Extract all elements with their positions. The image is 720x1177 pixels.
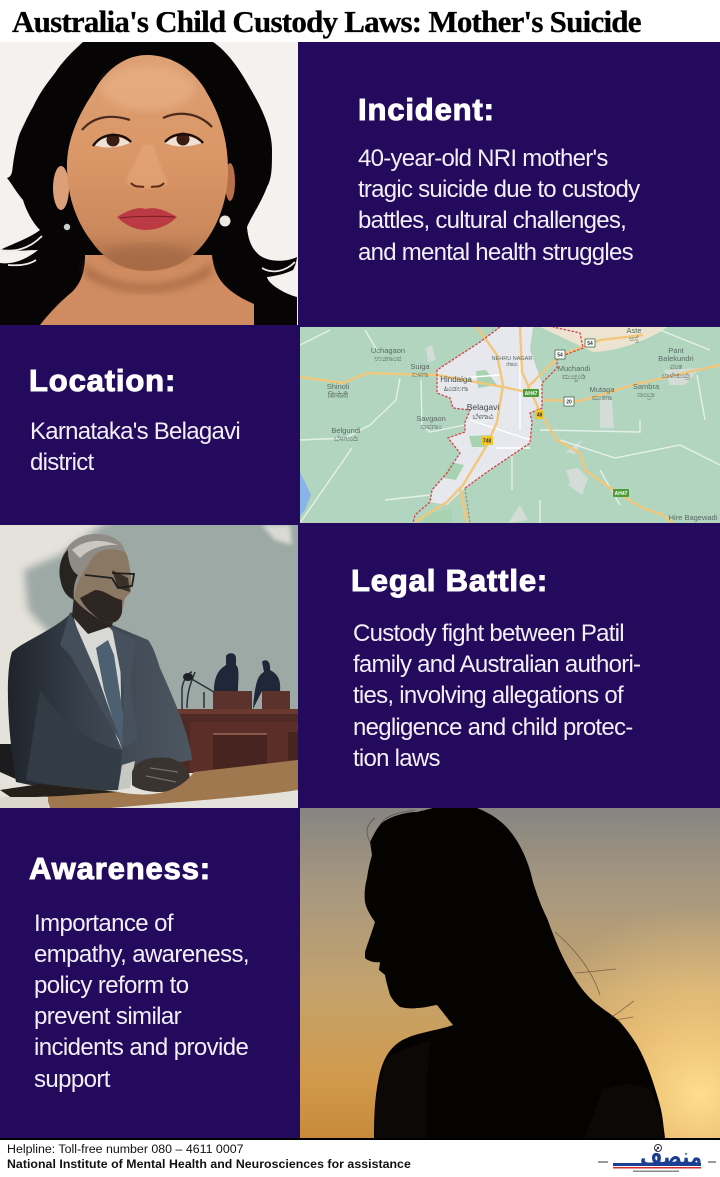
neck and head [72, 595, 118, 634]
lips [117, 208, 177, 230]
map labels: Pant [668, 346, 685, 355]
cuff and hands [118, 761, 135, 790]
shoulder tone [374, 1040, 430, 1138]
map labels: ಸಾಂಬ್ರಾ [637, 390, 655, 399]
map labels: Mutaga [589, 385, 615, 394]
desk [10, 760, 298, 808]
text: incident details [358, 145, 640, 266]
text: legal battle details: Custody fight between Patil [353, 620, 624, 647]
map labels: ಬೆಳಗಾವಿ [472, 412, 494, 421]
highway shields: 20 [566, 400, 572, 406]
text: awareness details: empathy, awareness, [34, 941, 249, 968]
panel: awareness [0, 808, 300, 1138]
panel: location [0, 325, 300, 525]
text: awareness details: prevent similar [34, 1003, 181, 1030]
text: location details: district [30, 449, 93, 476]
map labels: NEHRU NAGAR [492, 356, 532, 362]
wisps of hair [367, 810, 634, 1020]
panel: legal battle [298, 525, 720, 808]
nose [126, 145, 168, 188]
highway shields: 748 [483, 438, 491, 444]
map labels: ಸಾವಗಾಂ [420, 422, 442, 431]
map labels: ಅಸ್ತೆ [629, 334, 639, 343]
chair [0, 744, 18, 780]
text: incident details: and mental health struggles [358, 239, 633, 266]
footer: helpline: National Institute of Mental Health and Neurosciences for assistance [7, 1157, 411, 1171]
footer: helpline: Helpline: Toll-free number 080 – 4611 0007 [7, 1142, 244, 1156]
map labels: Shinoli [327, 382, 350, 391]
text: awareness details [34, 910, 249, 1093]
map labels: ಹಿಂಡಲಗಾ [444, 384, 469, 393]
map labels: ಸುಳಗಾ [411, 370, 429, 379]
text: location details [30, 418, 240, 476]
map labels: ಬೆಳಗುಂದಿ [334, 434, 358, 443]
highway shields: AH47 [525, 391, 538, 397]
beige town [540, 327, 667, 352]
text: legal battle details [353, 620, 640, 772]
logo [598, 1142, 716, 1172]
text: legal battle details: ties, involving allegations of [353, 682, 623, 709]
highway shields: 54 [587, 341, 593, 347]
map labels: Belgundi [331, 426, 361, 435]
map labels: Hindalga [440, 375, 472, 384]
hair [60, 534, 125, 600]
map labels: ಮುತಗಾ [592, 393, 612, 402]
heading: awareness: Awareness: [29, 851, 211, 886]
map labels: Suiga [410, 362, 430, 371]
eyes [94, 136, 130, 147]
photo: portrait of the mother [0, 42, 298, 325]
map labels: Muchandi [558, 364, 591, 373]
map labels: Savgaon [416, 414, 446, 423]
highway shields [481, 339, 629, 497]
map labels: Balekundri [658, 354, 694, 363]
text: awareness details: Importance of [34, 910, 173, 936]
map labels: ಉಚಗಾಂವ [375, 354, 402, 363]
torso [8, 612, 192, 791]
map labels: ಬಾಳೇಕುಂದ್ರಿ [662, 371, 691, 380]
text: location details: Karnataka's Belagavi [30, 418, 240, 445]
face [67, 55, 228, 271]
text: legal battle details: tion laws [353, 745, 440, 772]
map labels: ಮುಚ್ಚಂಡಿ [562, 372, 586, 381]
title: Australia's Child Custody Laws: Mother's Suicide [12, 4, 641, 39]
map: Belagavi district [300, 327, 720, 523]
minor roads [300, 330, 720, 523]
highway shields: AH47 [615, 491, 628, 497]
background figures [214, 653, 238, 691]
highway shields: 54 [557, 352, 563, 358]
eyebrows [82, 117, 130, 130]
panel: incident [298, 42, 720, 327]
map labels: Sambra [633, 382, 660, 391]
map labels: ನೆಹರು [506, 362, 518, 368]
wall paint [24, 510, 310, 730]
divider line [0, 1138, 720, 1140]
map labels: Uchagaon [371, 346, 405, 355]
text: incident details: tragic suicide due to custody [358, 176, 639, 203]
illustration: man in courtroom [0, 525, 298, 808]
shirt [72, 612, 122, 750]
city boundary [413, 327, 500, 523]
text: incident details: battles, cultural challenges, [358, 207, 626, 234]
judge bench [172, 709, 298, 773]
city area [430, 327, 542, 505]
heading: legal battle: Legal Battle: [351, 563, 548, 598]
text: awareness details: support [34, 1066, 110, 1093]
map labels: शिनोली [328, 391, 349, 400]
text: awareness details: incidents and provide [34, 1034, 248, 1061]
earrings [220, 216, 230, 226]
glasses [85, 573, 134, 588]
highway shields: 48 [537, 412, 542, 418]
map labels [327, 326, 718, 522]
neck and chest [40, 255, 254, 325]
ears [53, 166, 69, 210]
hair flicks [0, 236, 295, 271]
arm fold [26, 690, 122, 790]
text: incident details: 40-year-old NRI mother's [358, 145, 608, 172]
map labels: ಪಂತ [670, 362, 682, 371]
text: legal battle details: family and Australian authori- [353, 651, 640, 678]
tie [96, 640, 124, 750]
lapels [60, 612, 122, 745]
heading: location: Location: [29, 363, 176, 398]
text: legal battle details: negligence and child protec- [353, 714, 632, 741]
microphone [182, 672, 214, 709]
highways [300, 327, 720, 523]
footer: helpline [7, 1142, 411, 1171]
text: awareness details: policy reform to [34, 972, 188, 999]
logo: منصف [640, 1142, 702, 1171]
photo: silhouette of a woman at sunset [300, 808, 720, 1138]
map labels: Hire Bagewadi [669, 513, 718, 522]
map labels: Belagavi [467, 402, 499, 412]
heading: incident: Incident: [358, 92, 495, 127]
